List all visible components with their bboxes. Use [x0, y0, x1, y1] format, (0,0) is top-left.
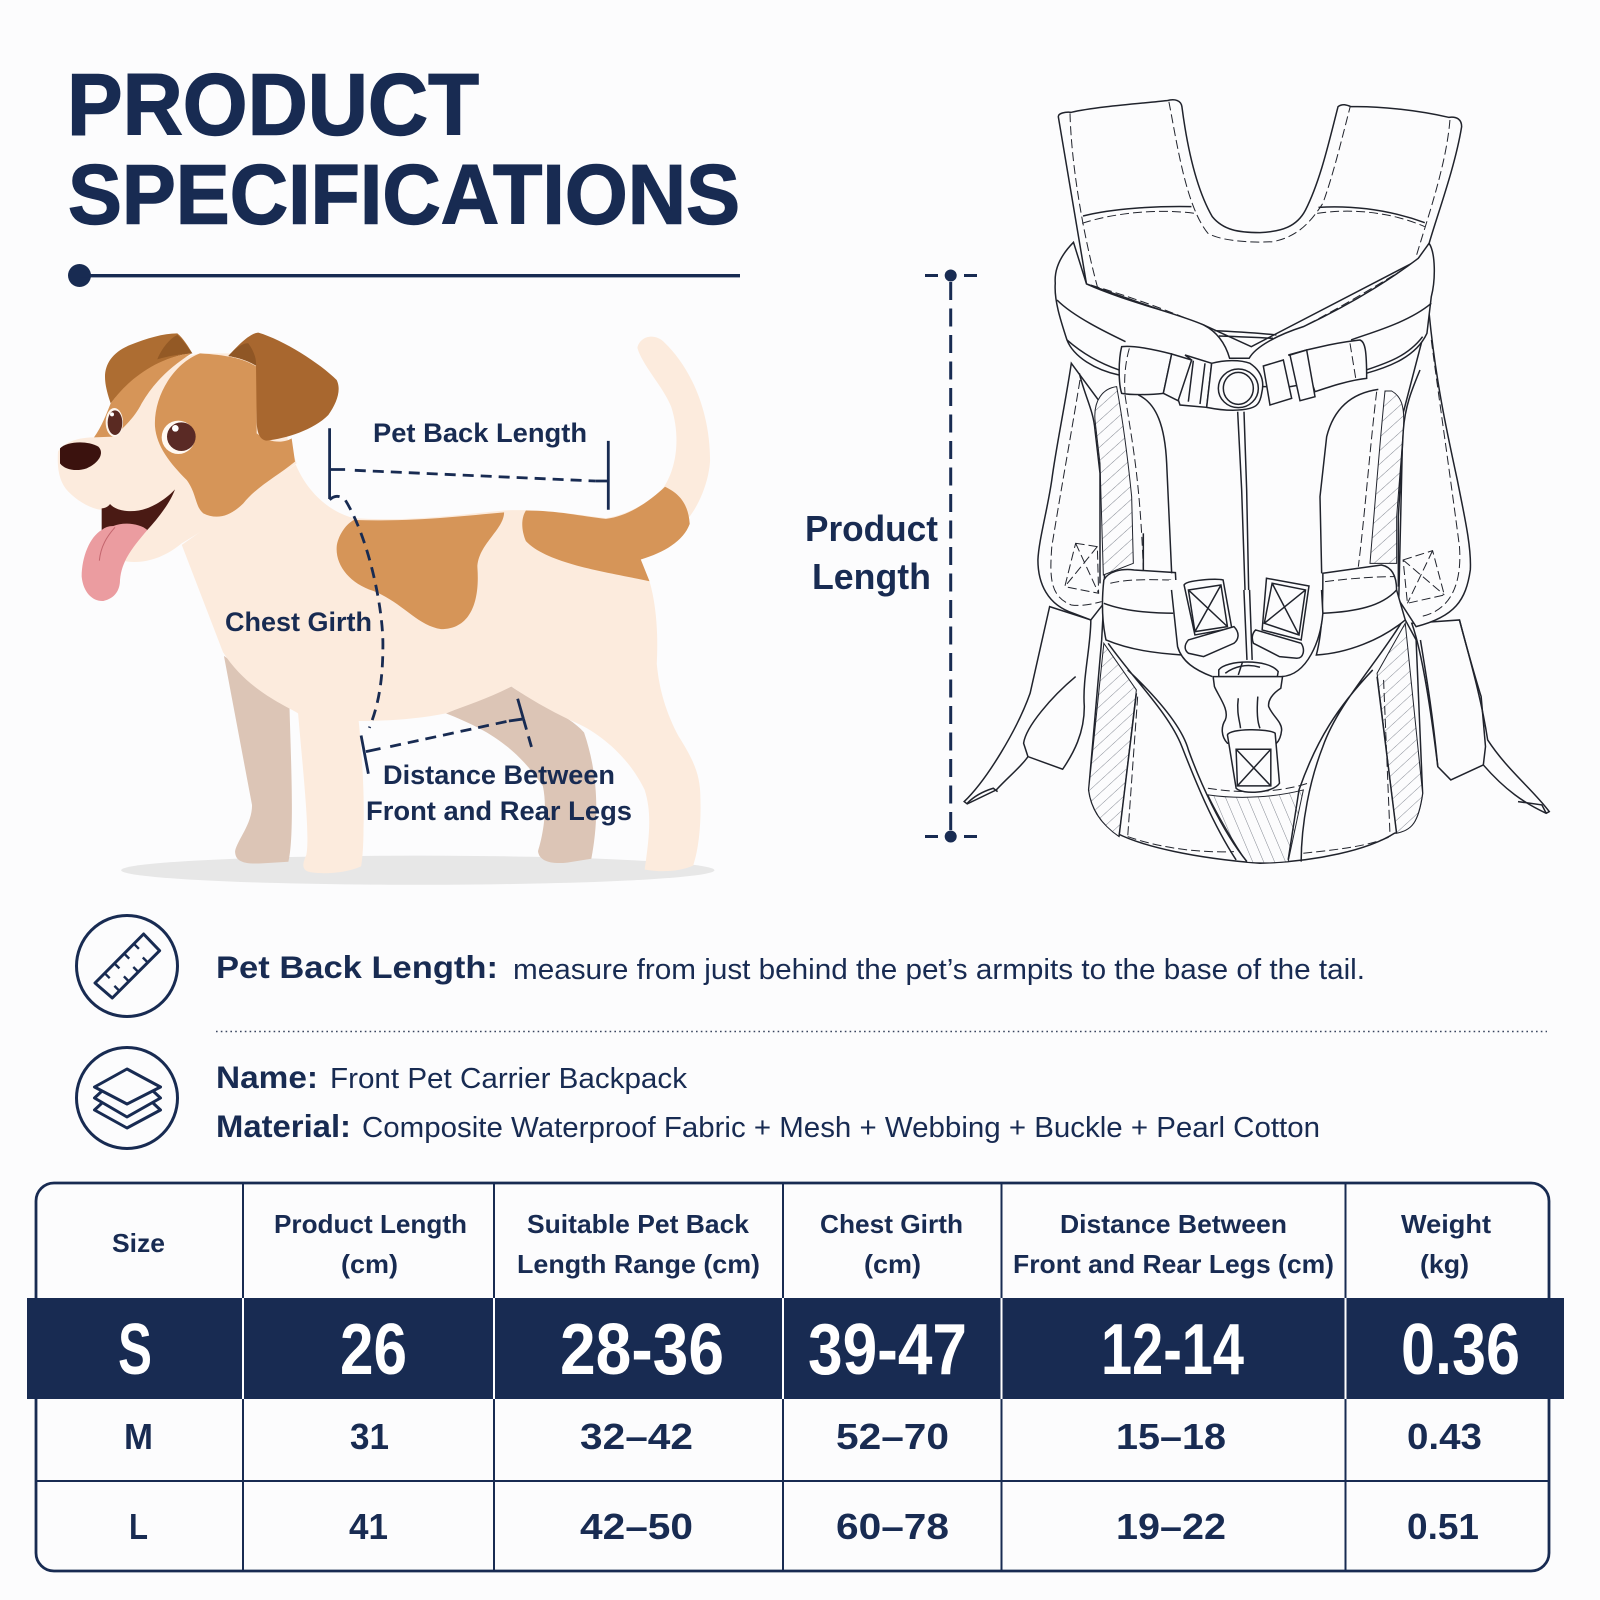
icon: layers	[76, 1048, 178, 1148]
row M: 15–18	[1116, 1416, 1226, 1457]
label: chest girth: Chest Girth	[225, 607, 372, 637]
highlighted row S: 12-14	[1101, 1310, 1244, 1390]
product length dimension	[805, 270, 977, 842]
highlighted row S	[27, 1298, 1564, 1399]
mouth and tongue	[102, 489, 175, 531]
icon: ruler	[76, 916, 178, 1016]
mesh panels	[1095, 387, 1133, 575]
table header row: Length Range (cm)	[517, 1249, 760, 1279]
zipper	[1238, 412, 1249, 590]
backpack strap panels, zipper and chest buckle	[1079, 340, 1420, 590]
backpack outer layers	[964, 100, 1549, 863]
hanging side straps	[964, 607, 1091, 804]
product name and material: Composite Waterproof Fabric + Mesh + Webbing + Buckle + Pearl Cotton	[362, 1112, 1320, 1144]
table header row: Product Length	[274, 1209, 467, 1239]
highlighted row S: 39-47	[808, 1310, 967, 1390]
chest straps with X boxes	[1169, 580, 1323, 677]
measurement lines on dog	[330, 428, 608, 774]
table header row: Weight	[1401, 1209, 1491, 1239]
row L: 19–22	[1116, 1506, 1226, 1547]
product name and material: Name:	[216, 1059, 318, 1095]
row M	[124, 1416, 1482, 1457]
strap panel fill	[1119, 380, 1347, 630]
label: pet back length: Pet Back Length	[373, 418, 587, 448]
product name and material	[216, 1059, 1320, 1144]
highlighted row S: 26	[340, 1310, 407, 1390]
lower body	[1089, 600, 1423, 863]
product length dimension: Length	[812, 556, 931, 597]
strap edges	[1138, 395, 1172, 573]
table frame and grid	[36, 1183, 1549, 1571]
outer wings	[1038, 363, 1108, 620]
highlighted row S: 0.36	[1401, 1310, 1520, 1390]
center buckle	[1213, 677, 1283, 743]
title: PRODUCT	[67, 56, 479, 154]
product name and material: Material:	[216, 1108, 351, 1144]
table header row: (cm)	[341, 1249, 398, 1279]
table header row: Chest Girth	[820, 1209, 963, 1239]
nose	[60, 442, 101, 470]
row L: 60–78	[836, 1506, 949, 1547]
label: distance between legs	[366, 760, 632, 826]
row L: L	[129, 1506, 148, 1547]
table header row	[112, 1209, 1491, 1279]
highlighted row S: 28-36	[560, 1310, 724, 1390]
neck panel	[1058, 100, 1462, 347]
row L: 41	[349, 1506, 388, 1547]
center ring	[1207, 361, 1263, 410]
row L: 0.51	[1407, 1506, 1479, 1547]
illustration: pet carrier backpack	[964, 100, 1549, 863]
table header row: Size	[112, 1228, 165, 1258]
product name and material: Front Pet Carrier Backpack	[330, 1063, 688, 1095]
dog head	[58, 333, 339, 601]
title	[67, 56, 740, 242]
padded collar	[1055, 242, 1434, 387]
table header row: (kg)	[1420, 1249, 1469, 1279]
pet back length note	[216, 949, 1365, 986]
title: SPECIFICATIONS	[68, 148, 740, 242]
table header row: Distance Between	[1060, 1209, 1287, 1239]
left buckle tab	[1119, 346, 1172, 395]
pet back length note: measure from just behind the pet’s armpits to the base of the tail.	[513, 954, 1365, 986]
row L: 42–50	[580, 1506, 693, 1547]
label: distance between legs: Distance Between	[383, 760, 615, 790]
dog body	[121, 337, 714, 885]
pet back length note: Pet Back Length:	[216, 949, 498, 985]
row M: 31	[350, 1416, 389, 1457]
row M: 32–42	[580, 1416, 693, 1457]
row M: M	[124, 1416, 153, 1457]
row M: 0.43	[1407, 1416, 1482, 1457]
right buckle tab	[1288, 340, 1367, 392]
title underline	[68, 264, 740, 287]
size table	[27, 1183, 1564, 1571]
row L	[129, 1506, 1479, 1547]
label: distance between legs: Front and Rear Legs	[366, 796, 632, 826]
eyes	[106, 408, 123, 437]
product length dimension: Product	[805, 508, 938, 549]
illustration: dog with measurements	[58, 333, 714, 885]
highlighted row S: S	[118, 1310, 152, 1390]
table header row: Front and Rear Legs (cm)	[1013, 1249, 1334, 1279]
waist band	[1102, 570, 1182, 655]
table header row: Suitable Pet Back	[527, 1209, 750, 1239]
row M: 52–70	[836, 1416, 949, 1457]
table header row: (cm)	[864, 1249, 921, 1279]
